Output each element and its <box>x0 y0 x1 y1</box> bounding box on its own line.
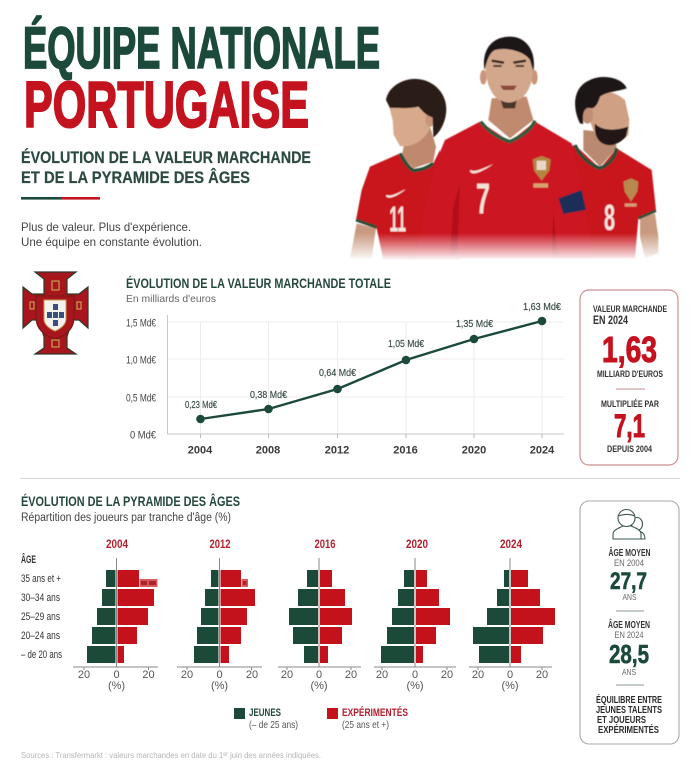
x axis labels: 2016 <box>393 444 418 456</box>
pyramid 2024: 2024 <box>500 539 523 551</box>
y axis labels: 1,0 Md€ <box>126 354 156 366</box>
x axis labels: 2012 <box>325 444 349 456</box>
pyramid 2016: 20 <box>281 669 293 681</box>
callout: average age <box>580 501 679 744</box>
pyramid 2016: (%) <box>310 680 328 692</box>
y axis labels: 0,5 Md€ <box>126 392 156 404</box>
intro text <box>21 220 202 249</box>
pyramid heading: Répartition des joueurs par tranche d'âge (%) <box>21 512 231 524</box>
data labels: 1,63 Md€ <box>523 301 561 313</box>
players illustration <box>340 37 680 261</box>
callout: market value 2024: 7,1 <box>614 408 645 444</box>
pyramid 2024: (%) <box>501 680 519 692</box>
pyramid 2004: 20 <box>142 669 155 681</box>
player 7 <box>415 37 594 258</box>
subtitle: ÉVOLUTION DE LA VALEUR MARCHANDE <box>21 148 311 167</box>
data labels: 0,23 Md€ <box>185 399 217 411</box>
pyramid 2024: 0 <box>507 669 513 681</box>
pyramid 2020 <box>374 539 456 692</box>
callout: average age: EN 2004 <box>614 558 644 569</box>
callout: market value 2024: EN 2024 <box>593 315 628 327</box>
legend: JEUNES <box>249 707 281 719</box>
pyramid 2020: (%) <box>406 680 424 692</box>
data line <box>200 321 542 419</box>
pyramid 2016: 20 <box>345 669 357 681</box>
y axis labels: 0 Md€ <box>130 430 156 442</box>
callout: average age: EN 2024 <box>614 630 644 641</box>
pyramid 2012: 2012 <box>210 539 230 551</box>
data labels: 1,35 Md€ <box>456 318 493 330</box>
callout: market value 2024: MILLIARD D'EUROS <box>597 369 663 380</box>
x axis labels <box>188 444 555 456</box>
age labels: – de 20 ans <box>21 649 62 661</box>
pyramid 2016: 0 <box>316 669 322 681</box>
pyramid 2020: 20 <box>441 669 453 681</box>
pyramid 2020: 2020 <box>406 539 428 551</box>
callout: market value 2024: VALEUR MARCHANDE <box>593 304 667 315</box>
x axis labels: 2024 <box>530 444 555 456</box>
data labels: 0,38 Md€ <box>250 389 287 401</box>
line chart <box>126 301 564 456</box>
player 7: 7 <box>476 175 490 223</box>
callout: average age: ÉQUILIBRE ENTRE <box>596 693 662 706</box>
x axis labels: 2004 <box>188 444 213 456</box>
player 8: 8 <box>604 197 615 238</box>
pyramid 2024: 20 <box>536 669 548 681</box>
pyramid 2012: (%) <box>211 680 228 692</box>
pyramid heading: ÉVOLUTION DE LA PYRAMIDE DES ÂGES <box>21 492 240 509</box>
market value heading <box>126 276 391 305</box>
pyramid 2004: 20 <box>78 669 90 681</box>
intro text: Plus de valeur. Plus d'expérience. <box>21 220 191 234</box>
legend <box>234 706 408 731</box>
title: ÉQUIPE NATIONALE <box>23 16 380 81</box>
intro text: Une équipe en constante évolution. <box>21 235 202 249</box>
title: PORTUGAISE <box>24 68 309 141</box>
pyramid 2016: 2016 <box>314 539 336 551</box>
data labels <box>185 301 561 411</box>
callout: average age: EXPÉRIMENTÉS <box>598 723 659 736</box>
callout: average age: ANS <box>622 668 636 677</box>
data points <box>196 317 546 423</box>
callout: average age: 27,7 <box>610 568 647 595</box>
callout: average age: ANS <box>622 593 636 602</box>
legend: (– de 25 ans) <box>249 719 298 731</box>
pyramid 2004: (%) <box>108 680 125 692</box>
pyramid heading <box>21 492 240 524</box>
callout: average age: 28,5 <box>609 639 649 669</box>
title <box>23 16 380 141</box>
data labels: 1,05 Md€ <box>388 338 424 350</box>
sources: Sources : Transfermarkt : valeurs marchandes en date du 1ᵉʳ juin des années indiquées. <box>21 750 321 760</box>
pyramid 2024: 20 <box>472 669 484 681</box>
subtitle <box>21 148 311 187</box>
pyramid 2012: 0 <box>216 669 223 681</box>
age labels: 25–29 ans <box>21 611 60 623</box>
age labels <box>21 553 62 661</box>
callout: average age: ÂGE MOYEN <box>608 546 650 559</box>
x axis labels: 2020 <box>462 444 486 456</box>
bottom fade <box>340 233 680 261</box>
callout: average age: ÂGE MOYEN <box>608 618 650 631</box>
crest <box>23 272 88 354</box>
callout: market value 2024: 1,63 <box>602 329 657 370</box>
age labels: 30–34 ans <box>21 592 60 604</box>
age labels: 35 ans et + <box>21 573 61 585</box>
pyramid 2012: 20 <box>181 669 193 681</box>
market value heading: ÉVOLUTION DE LA VALEUR MARCHANDE TOTALE <box>126 276 391 291</box>
legend: EXPÉRIMENTÉS <box>342 706 408 719</box>
callout: average age: ET JOUEURS <box>597 714 646 726</box>
legend: (25 ans et +) <box>342 719 389 731</box>
pyramid 2012: 20 <box>246 669 258 681</box>
age labels: 20–24 ans <box>21 630 60 642</box>
callout: average age: JEUNES TALENTS <box>596 704 662 716</box>
pyramid 2016 <box>278 539 361 692</box>
market value heading: En milliards d'euros <box>126 293 216 305</box>
x axis labels: 2008 <box>256 444 280 456</box>
player 8 <box>550 77 658 258</box>
pyramid 2012 <box>177 539 262 692</box>
y axis labels: 1,5 Md€ <box>126 318 156 330</box>
pyramid 2020: 20 <box>376 669 388 681</box>
y axis labels <box>126 318 156 442</box>
data labels: 0,64 Md€ <box>319 367 356 379</box>
callout: market value 2024: DEPUIS 2004 <box>607 444 653 455</box>
icon: people <box>613 510 645 539</box>
pyramid 2024 <box>469 539 555 692</box>
accent rule <box>21 197 100 200</box>
pyramid 2020: 0 <box>412 669 418 681</box>
pyramid 2004 <box>73 539 158 692</box>
subtitle: ET DE LA PYRAMIDE DES ÂGES <box>21 168 250 187</box>
player 11: 11 <box>389 199 406 240</box>
player 11 <box>350 79 460 260</box>
pyramid 2004: 0 <box>113 669 120 681</box>
callout: market value 2024 <box>580 290 678 465</box>
pyramid 2004: 2004 <box>106 539 129 551</box>
age labels: ÂGE <box>21 553 36 566</box>
callout: market value 2024: MULTIPLIÉE PAR <box>601 399 659 410</box>
